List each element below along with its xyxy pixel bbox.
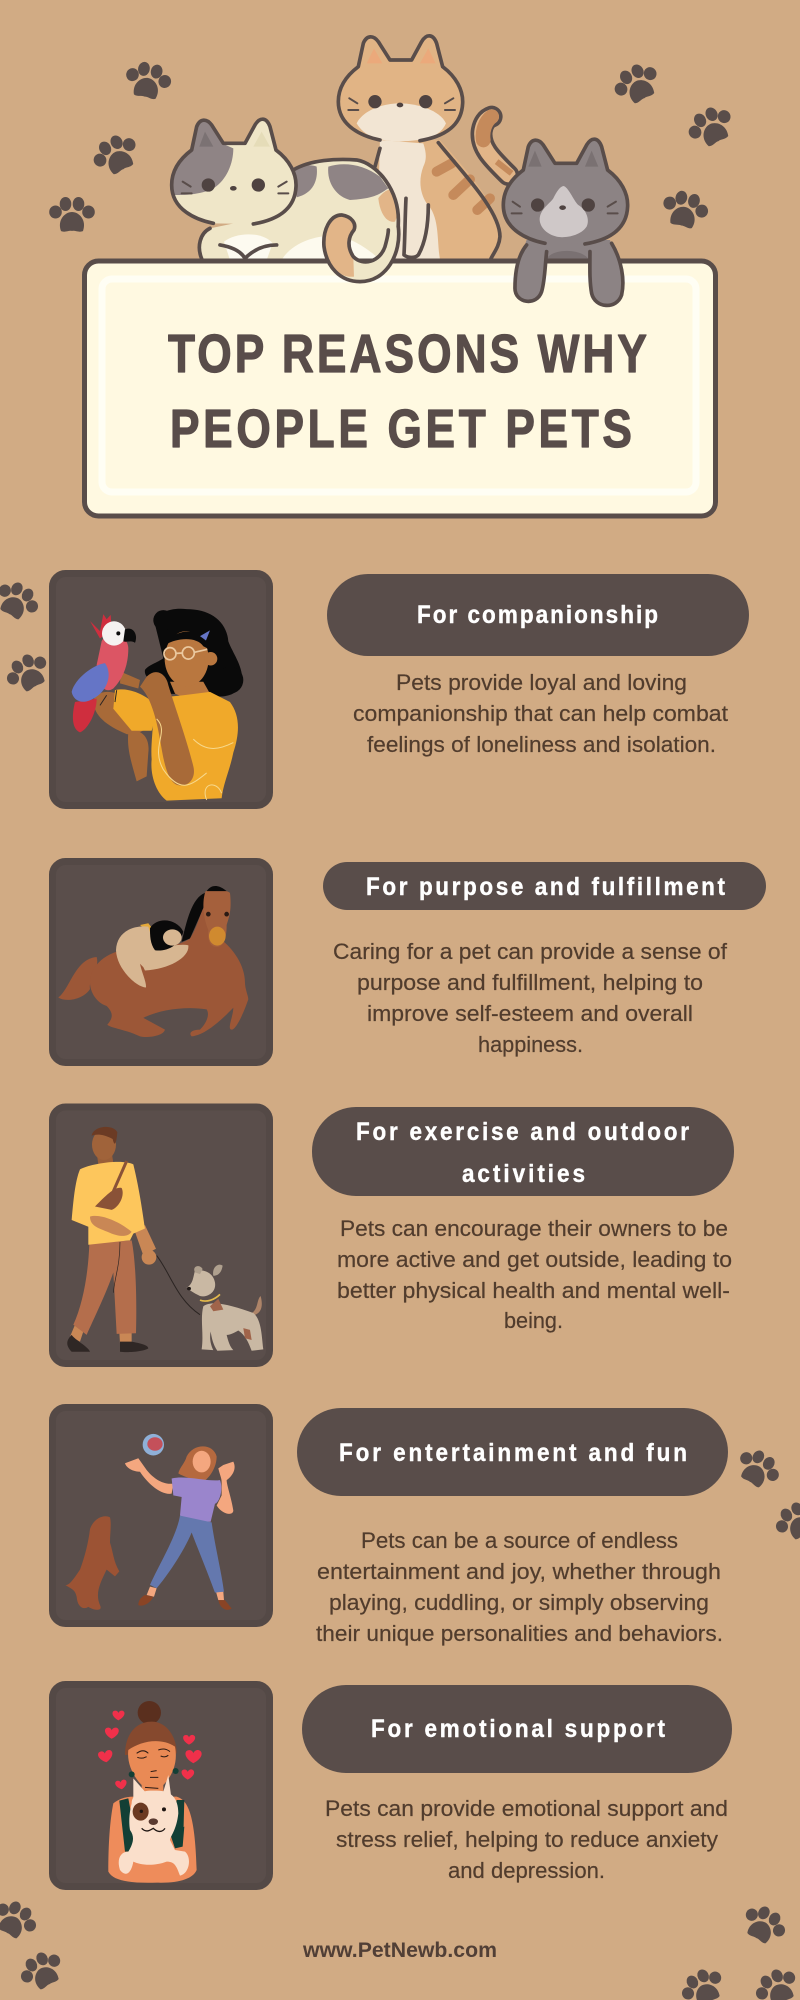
description [333,939,728,1057]
image tile: woman with parrot [52,574,270,806]
cats over the board [324,139,628,305]
description: playing, cuddling, or simply observing [329,1590,709,1615]
icon: paw [676,1962,730,2000]
icon: paw [731,1443,785,1494]
heading pill: activities [462,1160,585,1188]
gray cat [503,139,628,305]
description: their unique personalities and behaviors. [316,1621,723,1646]
heading pill: For purpose and fulfillment [366,873,725,901]
heading pill: For entertainment and fun [339,1439,687,1467]
description: feelings of loneliness and isolation. [367,732,716,757]
icon: paw [0,1894,42,1945]
panel: emotional support [52,1684,732,1886]
panel: companionship [52,574,749,806]
description: entertainment and joy, whether through [317,1559,721,1584]
description [316,1528,723,1646]
title: PEOPLE GET PETS [170,399,632,459]
cats behind the board [172,36,617,262]
title: TOP REASONS WHY [168,324,647,384]
description: and depression. [448,1858,605,1883]
footer website: www.PetNewb.com [302,1939,497,1962]
icon: paw [750,1962,800,2000]
icon: paw [682,100,739,152]
description: Caring for a pet can provide a sense of [333,939,728,964]
icon: paw [0,575,44,626]
icon: paw [659,187,711,232]
description [325,1796,728,1883]
paw prints: sides and bottom [0,575,800,2000]
description: improve self-esteem and overall [367,1001,693,1026]
image tile: woman hugging dog with hearts [52,1684,270,1886]
description: Pets can provide emotional support and [325,1796,728,1821]
gray cat torso [520,240,617,259]
heading pill: For companionship [417,601,658,629]
heading pill: For emotional support [371,1715,665,1743]
hearts [98,1711,202,1790]
heading pill: For exercise and outdoor [356,1118,689,1146]
description: Pets provide loyal and loving [396,670,687,695]
image tile: person hugging horse [52,862,270,1062]
heading pill [312,1107,734,1196]
description: happiness. [478,1032,583,1057]
icon: paw [49,197,95,232]
icon: paw [1,647,55,698]
icon: paw [608,57,665,109]
title [168,324,647,459]
description [353,670,728,757]
description [337,1216,732,1333]
icon: paw [737,1899,791,1950]
heading pill [323,862,766,910]
icon: paw [122,59,174,102]
title board [84,261,716,516]
description: being. [504,1308,563,1333]
panel: purpose and fulfillment [52,862,766,1062]
description: stress relief, helping to reduce anxiety [336,1827,718,1852]
panel: entertainment and fun [52,1408,728,1646]
description: companionship that can help combat [353,701,728,726]
panel: exercise and outdoor activities [52,1107,734,1364]
paw prints: header [49,57,739,232]
image tile: woman playing ball with dog [52,1408,270,1624]
heading pill [327,574,749,656]
icon: paw [15,1945,69,1996]
description: better physical health and mental well- [337,1278,730,1303]
description: more active and get outside, leading to [337,1247,732,1272]
description: purpose and fulfillment, helping to [357,970,703,995]
icon: paw [770,1495,800,1546]
heading pill [297,1408,728,1496]
description: Pets can be a source of endless [361,1528,678,1553]
image tile: man walking dog [52,1107,270,1364]
icon: paw [87,128,144,180]
calico cat [172,119,399,262]
description: Pets can encourage their owners to be [340,1216,728,1241]
heading pill [302,1685,732,1773]
orange cat [338,36,512,260]
calico tail [324,215,399,282]
